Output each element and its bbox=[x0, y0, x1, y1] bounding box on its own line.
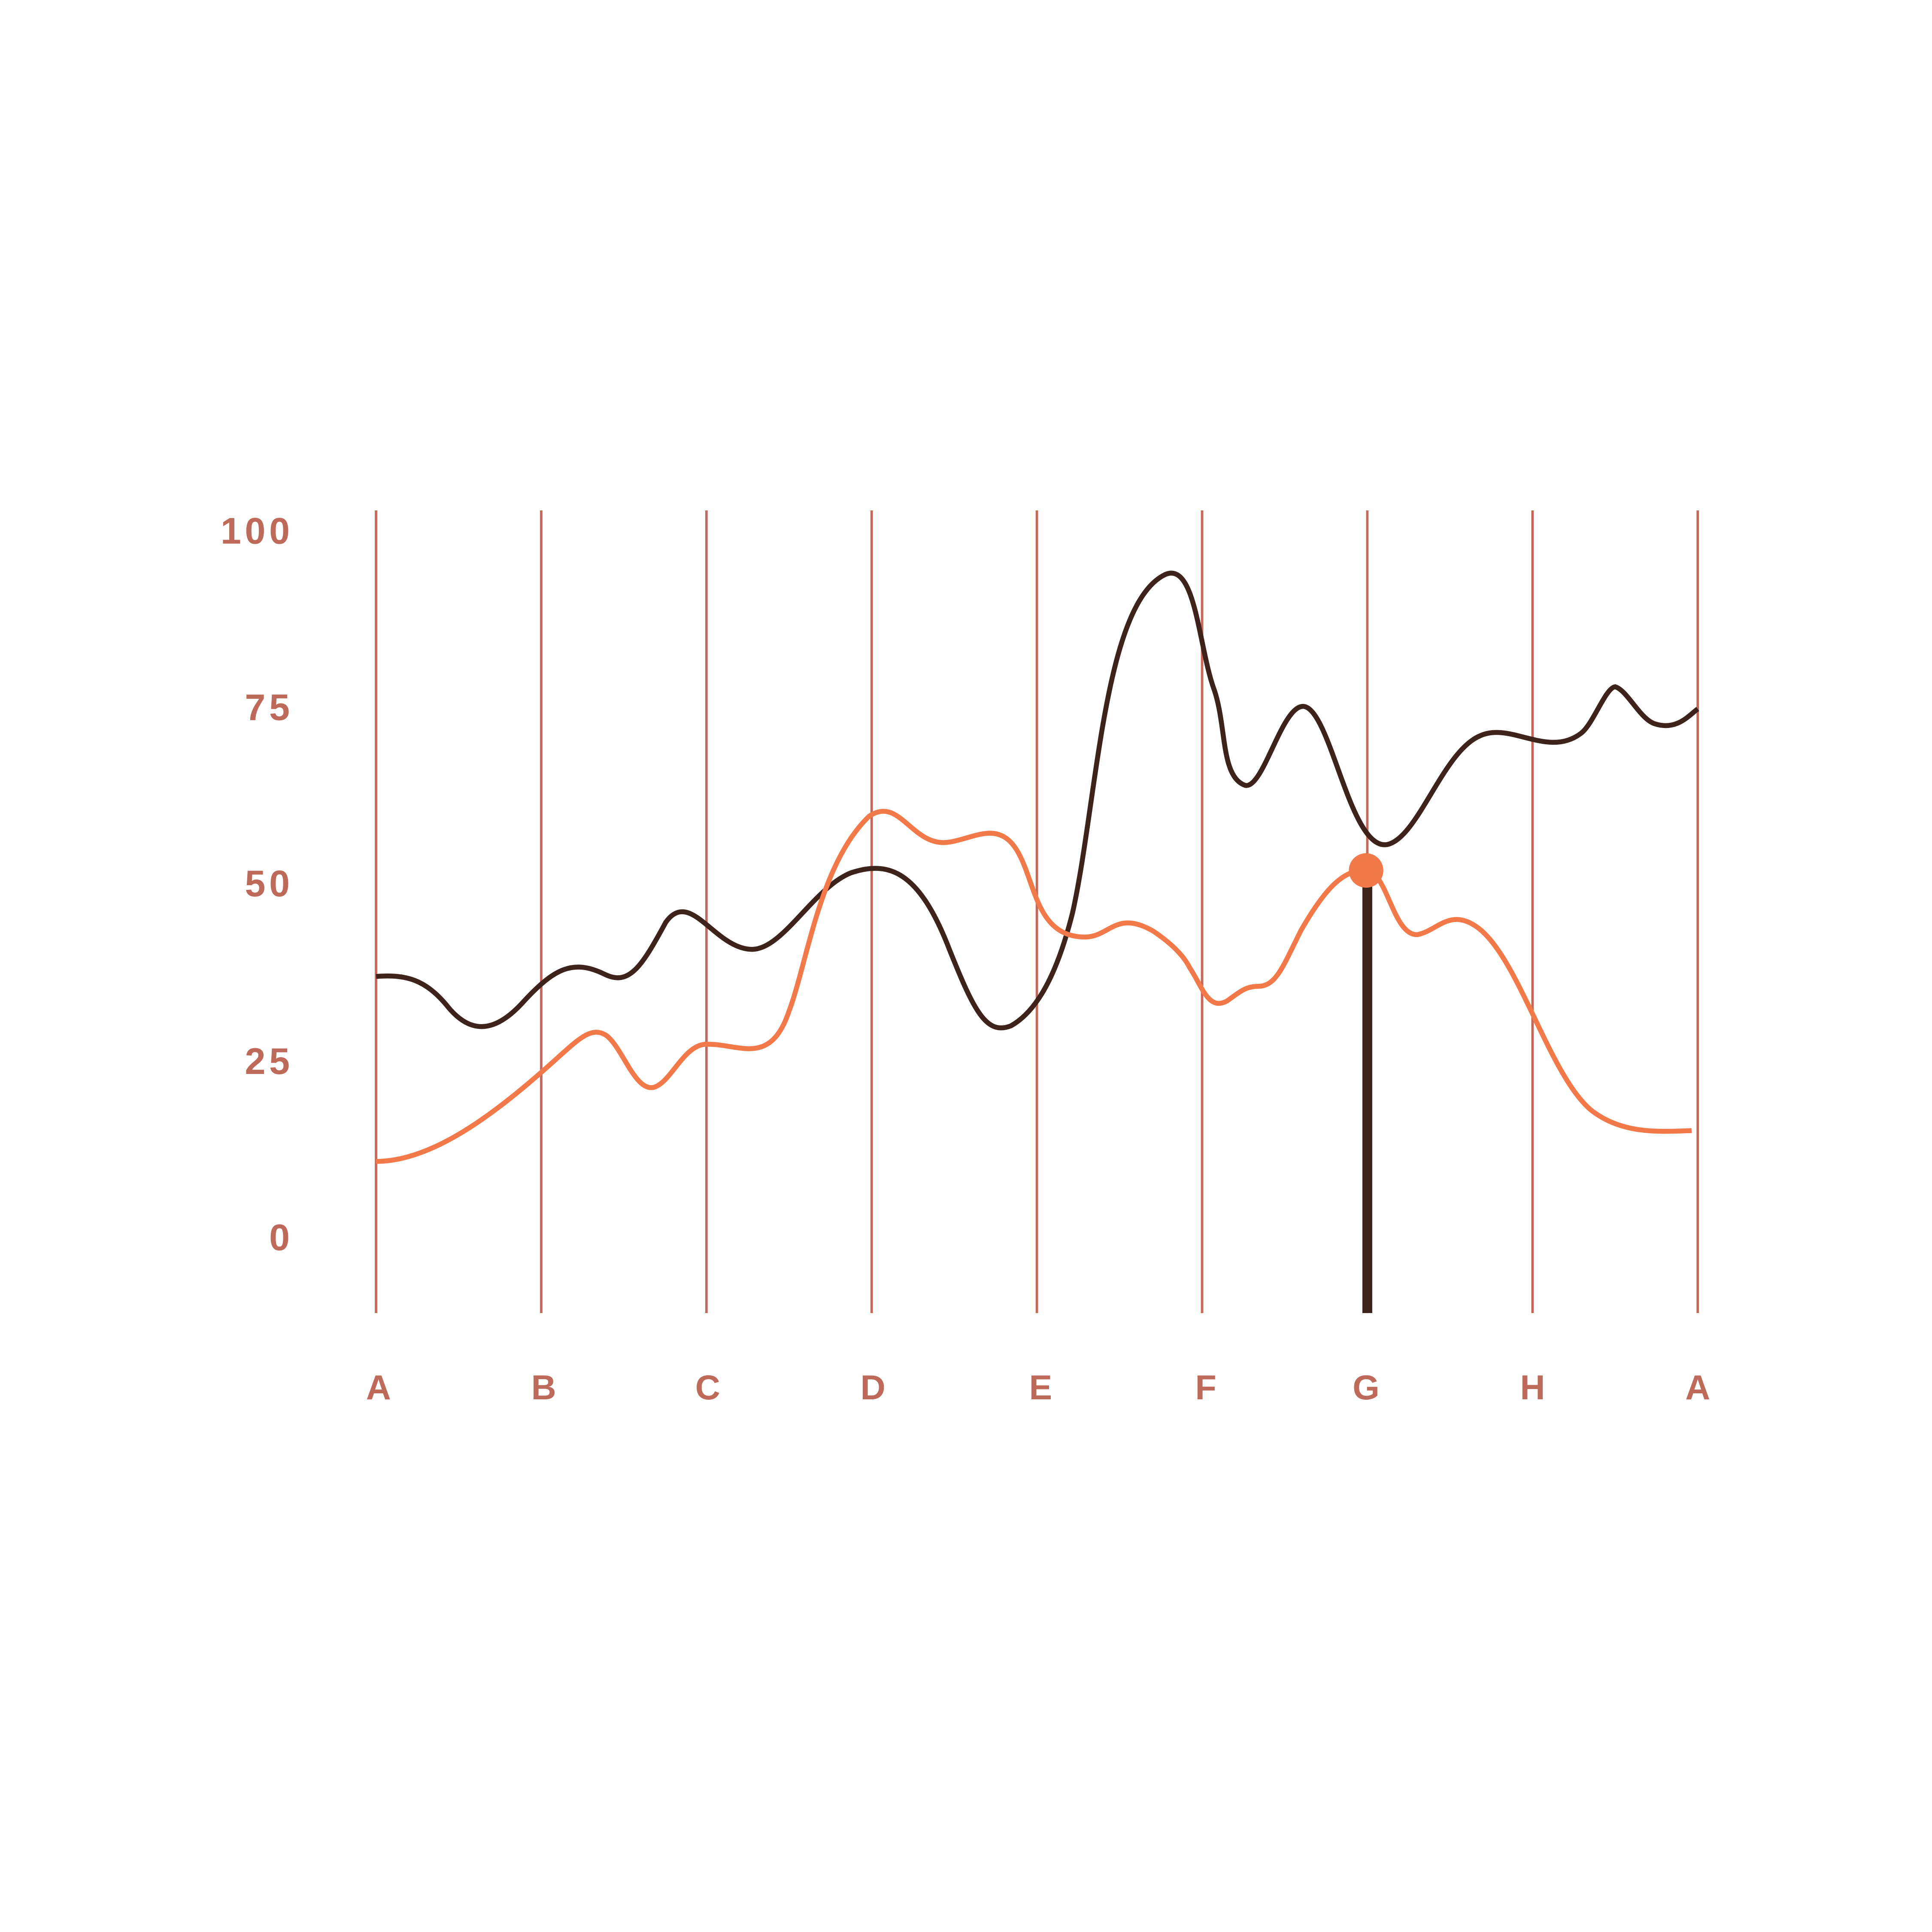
x-axis labels: E bbox=[1029, 1368, 1052, 1407]
x-axis labels: G bbox=[1353, 1368, 1380, 1407]
x-axis labels: C bbox=[695, 1368, 720, 1407]
highlight dot bbox=[1349, 853, 1383, 888]
highlight bar at G bbox=[1362, 870, 1372, 1313]
y-axis labels: 50 bbox=[245, 863, 294, 904]
y-axis labels: 0 bbox=[269, 1217, 294, 1259]
y-axis labels: 75 bbox=[245, 687, 294, 728]
y-axis labels: 100 bbox=[221, 511, 294, 552]
x-axis labels bbox=[366, 1368, 1710, 1407]
y-axis labels: 25 bbox=[245, 1041, 294, 1082]
orange series line bbox=[376, 811, 1692, 1162]
x-axis labels: B bbox=[531, 1368, 556, 1407]
x-axis labels: F bbox=[1195, 1368, 1216, 1407]
y-axis labels bbox=[221, 511, 294, 1259]
x-axis labels: A bbox=[366, 1368, 391, 1407]
dark series line bbox=[376, 573, 1698, 1028]
x-axis labels: H bbox=[1520, 1368, 1545, 1407]
x-axis labels: A bbox=[1685, 1368, 1710, 1407]
x-axis labels: D bbox=[861, 1368, 886, 1407]
